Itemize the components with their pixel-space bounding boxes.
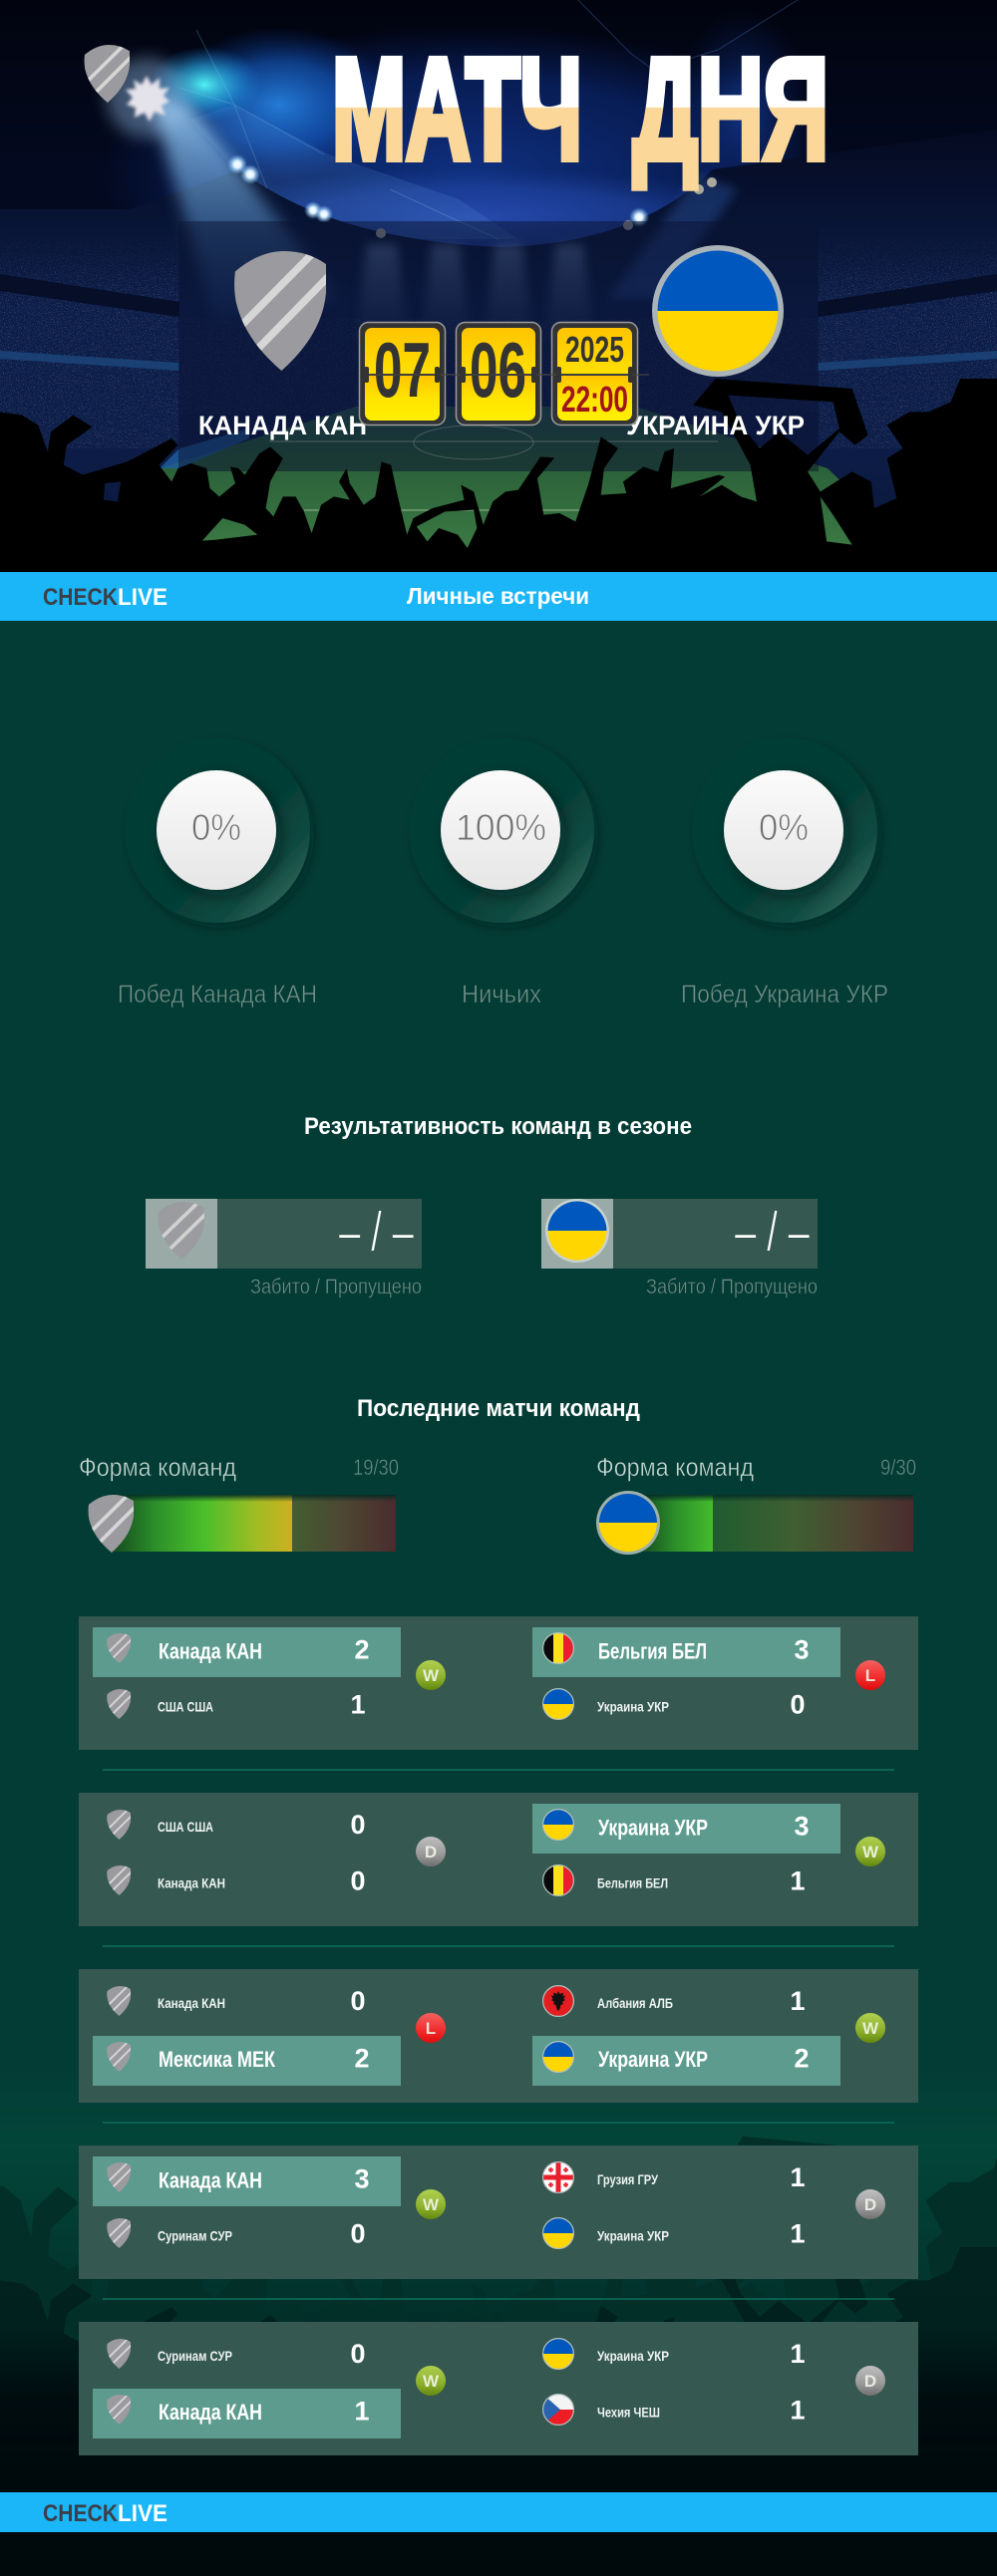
icon: small shield: [85, 45, 132, 103]
stat: Ukraine wins: 0%: [759, 807, 809, 848]
stat: Ukraine wins: Побед Украина УКР: [681, 981, 888, 1008]
right match: W: [862, 2019, 879, 2038]
left match: [93, 1986, 446, 2086]
right match: [532, 1804, 885, 1896]
right match: 2: [794, 2043, 810, 2073]
card: day: 07: [374, 326, 431, 414]
title word: match: МАТЧ: [332, 29, 582, 189]
left match: [93, 2156, 446, 2248]
right match: 1: [790, 2218, 806, 2248]
left match: L: [426, 2019, 436, 2038]
right match: 1: [790, 1865, 806, 1895]
left match: Канада КАН: [158, 1995, 225, 2011]
form: Ukraine: Форма команд: [596, 1452, 754, 1482]
panel: Canada goals: Забито / Пропущено: [250, 1276, 422, 1298]
stat: Canada wins: [118, 737, 317, 1008]
left match: [93, 2339, 446, 2438]
page background: [0, 620, 997, 2576]
stadium lamps: [227, 154, 717, 238]
right match: [542, 2161, 885, 2249]
foreground crowd silhouette: [0, 379, 997, 578]
icon: Canada shield: [234, 251, 330, 371]
title: [332, 29, 829, 189]
right match: W: [862, 1843, 879, 1861]
card: month: [457, 323, 540, 425]
header bar: [0, 572, 997, 621]
left match: [107, 1810, 446, 1895]
match panel 4: [79, 2146, 918, 2279]
floodlight flare: [107, 58, 186, 138]
match panel 2: [79, 1793, 918, 1926]
background crowd silhouettes: [0, 2137, 997, 2446]
flip clock date: [359, 323, 649, 425]
stat: Canada wins: 0%: [191, 807, 241, 848]
stat: Ukraine wins: [681, 737, 888, 1008]
right match: 1: [790, 2396, 806, 2426]
heading: season performance: Результативность команд в сезоне: [304, 1113, 692, 1140]
panel: Ukraine goals: – / –: [735, 1200, 811, 1263]
heading: recent matches: Последние матчи команд: [357, 1395, 640, 1422]
form: Ukraine: 9/30: [880, 1455, 916, 1480]
left match: 0: [350, 1810, 366, 1840]
left match: 3: [354, 2164, 370, 2194]
icon: Ukraine flag: [652, 245, 784, 377]
right match: Украина УКР: [597, 2348, 669, 2364]
icon: shield: [89, 1495, 136, 1553]
footer logo: CHECK: [43, 2500, 119, 2527]
right match: L: [865, 1666, 875, 1685]
left match: Канада КАН: [159, 2168, 262, 2192]
left match: США США: [158, 1819, 213, 1835]
logo: [43, 584, 167, 611]
card: day: [359, 323, 445, 425]
front crowd layer: [0, 2247, 997, 2446]
panel: Ukraine goals: Забито / Пропущено: [646, 1276, 818, 1298]
hero stadium background: [0, 0, 997, 572]
panel: head-to-head percentages: [118, 737, 888, 1008]
match panel 5: [79, 2322, 918, 2455]
form: Canada: 19/30: [353, 1455, 399, 1480]
card: year and time: 2025: [565, 329, 624, 370]
left match: W: [423, 1666, 440, 1685]
right match: Украина УКР: [597, 1698, 669, 1714]
right match: 1: [790, 2339, 806, 2369]
dark match panel: [178, 221, 819, 471]
right match: D: [864, 2372, 876, 2391]
panel: Ukraine goals: [541, 1199, 818, 1298]
left match: 2: [354, 2043, 370, 2073]
left match: Канада КАН: [159, 1638, 262, 1664]
team name: Canada: КАНАДА КАН: [198, 411, 367, 440]
right match: 1: [790, 1986, 806, 2016]
left match: Суринам СУР: [158, 2348, 232, 2364]
title word: day: ДНЯ: [633, 29, 829, 189]
form: Canada: Форма команд: [79, 1452, 236, 1482]
footer logo: [43, 2500, 167, 2527]
match panel 3: [79, 1969, 918, 2103]
card: month: 06: [470, 326, 526, 414]
right match: Албания АЛБ: [597, 1995, 673, 2011]
right match: 1: [790, 2162, 806, 2192]
back crowd layer: [0, 2137, 997, 2412]
left match: 0: [350, 2339, 366, 2369]
stat: draws: [409, 737, 594, 1008]
panel: Canada goals: – / –: [339, 1200, 415, 1263]
section heading: Личные встречи: [407, 583, 589, 609]
card: year and time: [552, 323, 638, 425]
right match: 3: [794, 1812, 810, 1842]
footer bar: [0, 2492, 997, 2532]
right match: Украина УКР: [598, 2047, 708, 2072]
panel: Canada goals: [146, 1199, 422, 1298]
form: Canada: [79, 1452, 399, 1553]
right match: Бельгия БЕЛ: [598, 1638, 707, 1664]
left match: Канада КАН: [158, 1875, 225, 1891]
right match: Украина УКР: [598, 1816, 708, 1840]
team name: Ukraine: УКРАИНА УКР: [626, 411, 805, 440]
left match: Суринам СУР: [158, 2228, 232, 2244]
right match: [532, 1627, 885, 1720]
right match: D: [864, 2195, 876, 2214]
left match: W: [423, 2195, 440, 2214]
footer logo: LIVE: [118, 2500, 167, 2527]
left match: 0: [350, 2218, 366, 2248]
match panel 1: [79, 1616, 918, 1750]
left match: 2: [354, 1634, 370, 1664]
left match: 1: [354, 2396, 370, 2426]
stat: draws: Ничьих: [462, 981, 541, 1008]
right match: Украина УКР: [597, 2228, 669, 2244]
right match: 0: [790, 1690, 806, 1720]
football pitch: [75, 407, 922, 558]
right match: Чехия ЧЕШ: [597, 2404, 660, 2420]
logo: CHECK: [43, 584, 119, 611]
right match: 3: [794, 1634, 810, 1664]
left match: 0: [350, 1865, 366, 1895]
left match: Мексика МЕК: [159, 2047, 275, 2072]
stat: Canada wins: Побед Канада КАН: [118, 981, 317, 1008]
left match: W: [423, 2372, 440, 2391]
right match: Грузия ГРУ: [597, 2171, 658, 2187]
left match: Канада КАН: [159, 2400, 262, 2425]
form bar: [110, 1495, 396, 1552]
icon: flag: [596, 1491, 660, 1555]
card: year and time: 22:00: [561, 379, 628, 420]
left match: 0: [350, 1986, 366, 2016]
right match: Бельгия БЕЛ: [597, 1875, 668, 1891]
form: Ukraine: [596, 1452, 916, 1555]
right match: [532, 1985, 885, 2086]
stat: draws: 100%: [456, 807, 546, 848]
left match: [93, 1627, 446, 1720]
logo: LIVE: [118, 584, 167, 611]
right match: [542, 2338, 885, 2426]
form bar: [638, 1495, 913, 1552]
left match: 1: [350, 1690, 366, 1720]
left match: D: [425, 1843, 437, 1861]
left match: США США: [158, 1698, 213, 1714]
